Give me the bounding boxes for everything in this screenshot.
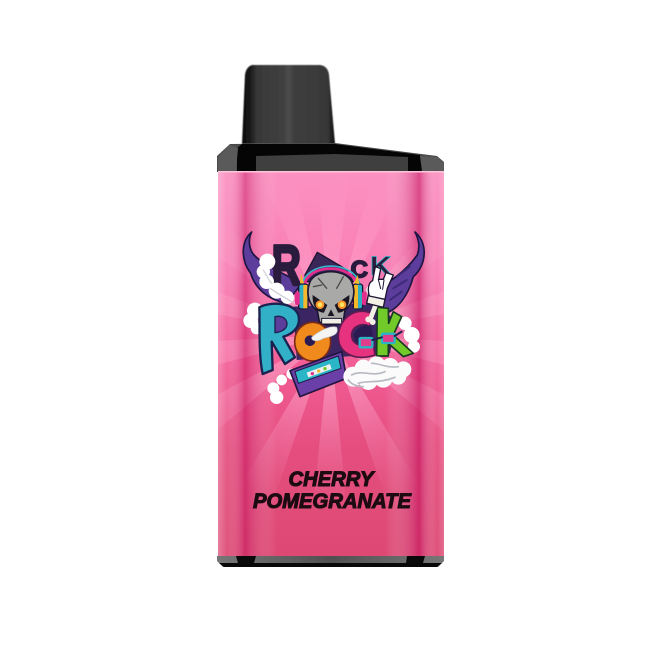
pink body (218, 171, 444, 556)
top word: R (272, 235, 301, 298)
flavour name: POMEGRANATE (253, 490, 412, 513)
skull (308, 272, 354, 325)
smoke across O (312, 327, 337, 341)
bone and hand (365, 267, 393, 325)
headphones band (295, 252, 367, 309)
left cloud (243, 303, 263, 334)
left wing (243, 232, 302, 303)
flavour name: CHERRY (288, 468, 375, 491)
sunburst rays (218, 225, 444, 486)
mouthpiece cap (242, 65, 335, 144)
glasses (360, 332, 402, 347)
letter K (377, 307, 413, 357)
cassette (290, 352, 347, 397)
logo artwork: C (351, 256, 368, 283)
right wing (370, 232, 424, 315)
right cloud (366, 285, 420, 353)
letter O (295, 322, 331, 361)
flavour name (253, 468, 412, 513)
cassette smoke (267, 369, 297, 404)
upper left smoke (257, 254, 295, 304)
lower right cloud (343, 356, 411, 390)
letter C (338, 311, 375, 357)
letter R (259, 304, 299, 374)
top collar (217, 143, 444, 172)
logo artwork (243, 232, 424, 404)
bottom base (217, 556, 444, 567)
purple mass behind letters (293, 303, 397, 360)
logo artwork: K (370, 251, 392, 281)
device (217, 64, 444, 567)
